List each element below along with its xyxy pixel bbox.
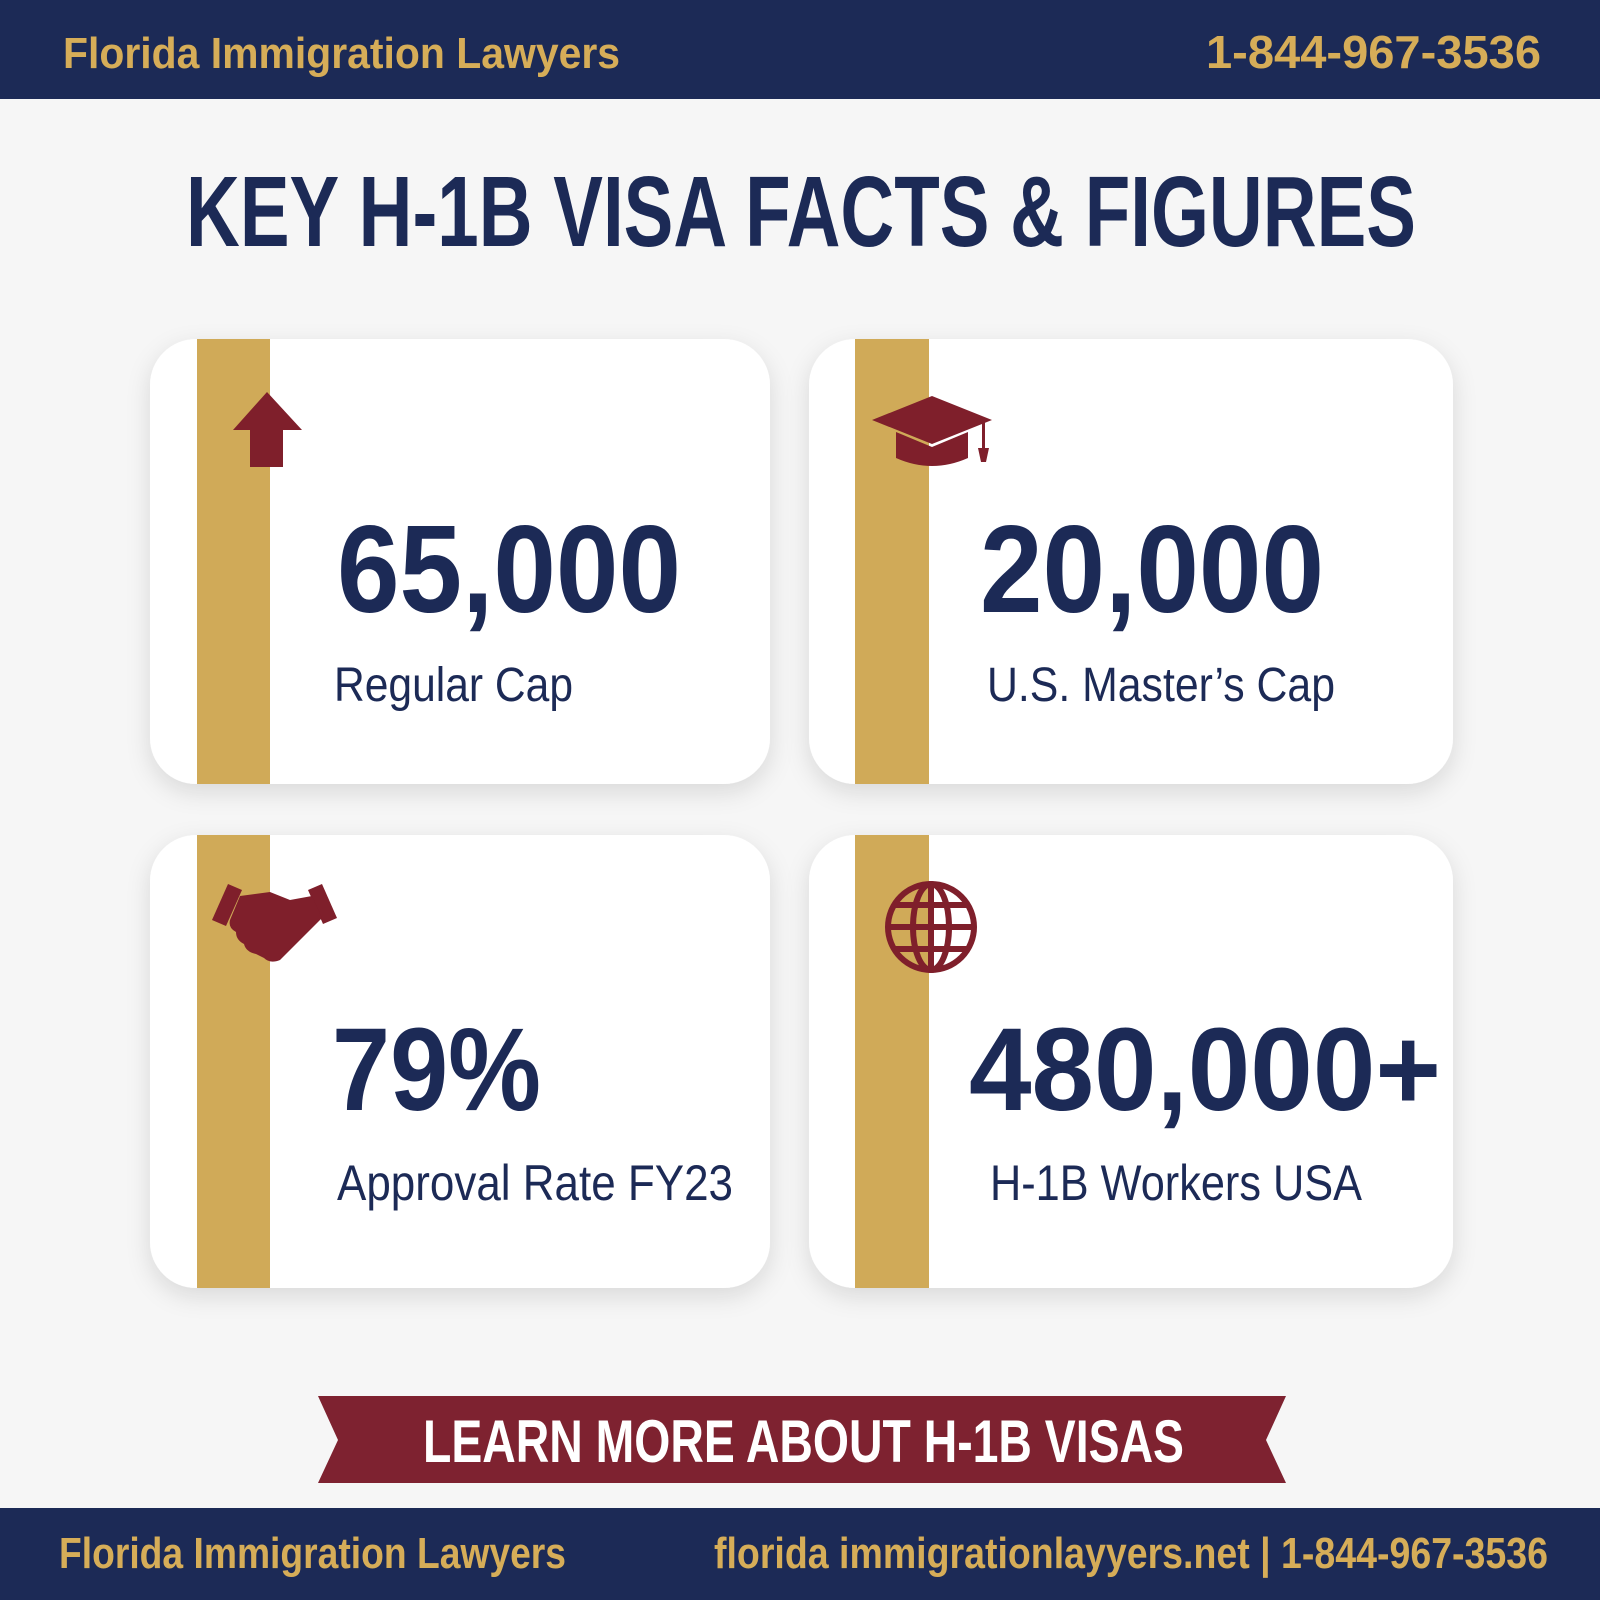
icon: up arrow [233, 392, 302, 467]
icon: graduation cap [872, 396, 992, 466]
card: masters cap: U.S. Master’s Cap [987, 659, 1335, 712]
card: workers: 480,000+ [969, 1004, 1441, 1136]
header bar: 1-844-967-3536 [1206, 26, 1541, 78]
card: regular cap: 65,000 [337, 501, 681, 639]
card: regular cap [150, 339, 770, 784]
footer bar: Florida Immigration Lawyers [59, 1529, 566, 1578]
card: workers [809, 835, 1453, 1288]
card: approval rate: Approval Rate FY23 [337, 1155, 733, 1211]
footer bar [0, 1508, 1600, 1600]
icon: globe [888, 884, 974, 970]
banner: learn more [318, 1396, 1286, 1483]
card: masters cap [809, 339, 1453, 784]
card: workers: H-1B Workers USA [990, 1155, 1363, 1211]
icon: handshake [212, 884, 337, 962]
card: approval rate: 79% [332, 1004, 541, 1136]
banner: learn more: LEARN MORE ABOUT H-1B VISAS [423, 1408, 1184, 1475]
header bar [0, 0, 1600, 99]
card: masters cap: 20,000 [980, 501, 1324, 639]
header bar: Florida Immigration Lawyers [63, 29, 620, 78]
card: approval rate [150, 835, 770, 1288]
card: regular cap: Regular Cap [334, 659, 573, 712]
